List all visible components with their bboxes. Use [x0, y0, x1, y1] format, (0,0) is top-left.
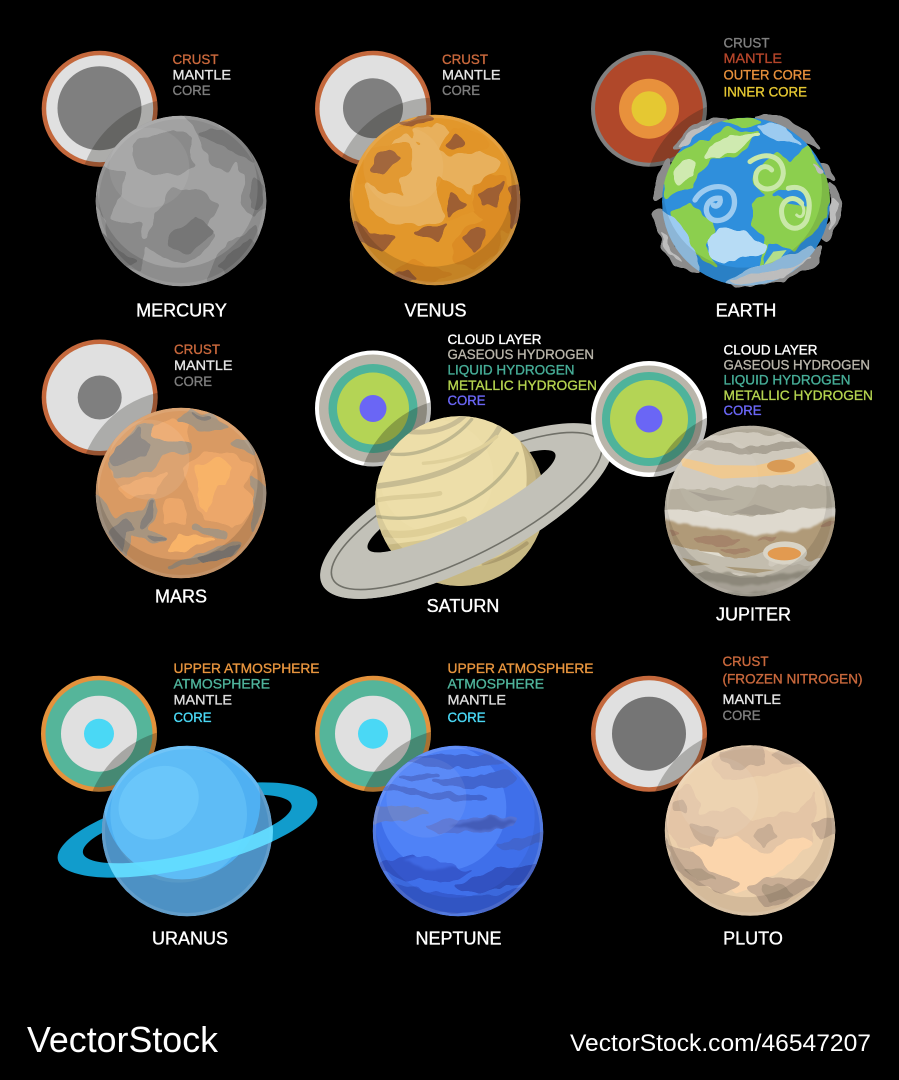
panel: venus — [315, 51, 538, 320]
mars cutaway — [42, 340, 158, 456]
saturn legend — [448, 331, 597, 408]
neptune legend: ATMOSPHERE — [448, 676, 544, 692]
watermark url: VectorStock.com/46547207 — [570, 1030, 871, 1057]
venus legend: MANTLE — [442, 66, 500, 82]
pluto legend: (FROZEN NITROGEN) — [722, 670, 862, 686]
mercury label: MERCURY — [136, 300, 227, 320]
uranus planet — [102, 746, 272, 916]
earth label: EARTH — [716, 300, 776, 320]
pluto cutaway — [591, 676, 707, 792]
mercury legend: CORE — [172, 82, 210, 98]
venus legend — [442, 51, 500, 98]
neptune legend — [448, 660, 594, 725]
earth cutaway — [591, 50, 707, 167]
earth cloud halo — [653, 117, 840, 286]
mars legend: CORE — [174, 373, 212, 389]
neptune legend: MANTLE — [448, 692, 506, 708]
panel: uranus — [41, 660, 326, 948]
mars legend: MANTLE — [174, 357, 232, 373]
mars label: MARS — [155, 586, 207, 606]
panel: pluto — [591, 653, 862, 948]
uranus cutaway — [41, 676, 157, 792]
jupiter legend — [724, 342, 873, 418]
saturn label: SATURN — [427, 596, 499, 616]
mercury legend — [172, 51, 231, 98]
jupiter cutaway — [591, 361, 707, 477]
uranus legend — [174, 660, 320, 725]
venus legend: CORE — [442, 82, 480, 98]
uranus legend: CORE — [174, 709, 212, 725]
venus label: VENUS — [404, 300, 467, 320]
mars planet — [96, 400, 266, 578]
earth planet — [653, 109, 840, 288]
saturn legend: CORE — [448, 392, 486, 408]
panel: neptune — [315, 660, 594, 948]
pluto legend: CRUST — [722, 653, 769, 669]
uranus ring front — [108, 825, 273, 878]
earth legend: MANTLE — [724, 50, 782, 66]
mars legend: CRUST — [174, 341, 220, 357]
panel: mars — [42, 340, 284, 606]
uranus label: URANUS — [152, 928, 228, 948]
saturn planet — [375, 416, 541, 586]
panel: jupiter — [591, 342, 873, 624]
uranus ring back — [49, 763, 326, 897]
earth foreground clouds — [660, 122, 837, 284]
saturn legend: METALLIC HYDROGEN — [448, 377, 597, 393]
jupiter label: JUPITER — [716, 604, 791, 624]
mercury planet — [96, 108, 267, 286]
neptune legend: UPPER ATMOSPHERE — [448, 660, 594, 676]
jupiter legend: LIQUID HYDROGEN — [724, 372, 850, 388]
jupiter legend: CORE — [724, 402, 762, 418]
uranus legend: ATMOSPHERE — [174, 676, 270, 692]
jupiter legend: GASEOUS HYDROGEN — [724, 356, 870, 372]
earth legend — [724, 34, 811, 100]
venus planet — [350, 107, 520, 285]
panel: earth — [591, 34, 849, 320]
neptune cutaway — [315, 676, 431, 792]
mars legend — [174, 341, 232, 389]
uranus legend: MANTLE — [174, 692, 232, 708]
mercury cutaway — [42, 50, 158, 167]
earth legend: INNER CORE — [724, 84, 807, 100]
earth legend: OUTER CORE — [724, 66, 811, 82]
mercury legend: MANTLE — [172, 66, 231, 82]
earth globe — [662, 109, 830, 288]
pluto legend: CORE — [722, 707, 760, 723]
pluto label: PLUTO — [723, 928, 783, 948]
earth legend: CRUST — [724, 34, 770, 50]
saturn cutaway — [315, 350, 431, 466]
neptune planet — [371, 738, 543, 916]
pluto planet — [665, 737, 835, 916]
pluto legend: MANTLE — [722, 691, 781, 707]
panel: saturn — [315, 334, 610, 612]
jupiter legend: CLOUD LAYER — [724, 342, 818, 358]
uranus legend: UPPER ATMOSPHERE — [174, 660, 320, 676]
watermark logo: VectorStock — [27, 1019, 219, 1060]
neptune legend: CORE — [448, 709, 486, 725]
mercury legend: CRUST — [172, 51, 219, 67]
pluto legend — [722, 653, 862, 723]
saturn ring front — [322, 461, 610, 599]
neptune label: NEPTUNE — [415, 928, 502, 948]
venus cutaway — [315, 50, 431, 164]
saturn ring back — [298, 389, 635, 633]
saturn legend: CLOUD LAYER — [448, 331, 542, 347]
jupiter legend: METALLIC HYDROGEN — [724, 387, 873, 403]
panel: mercury — [42, 51, 284, 320]
saturn legend: GASEOUS HYDROGEN — [448, 346, 594, 362]
venus legend: CRUST — [442, 51, 488, 67]
saturn legend: LIQUID HYDROGEN — [448, 362, 574, 378]
jupiter planet — [664, 426, 836, 596]
